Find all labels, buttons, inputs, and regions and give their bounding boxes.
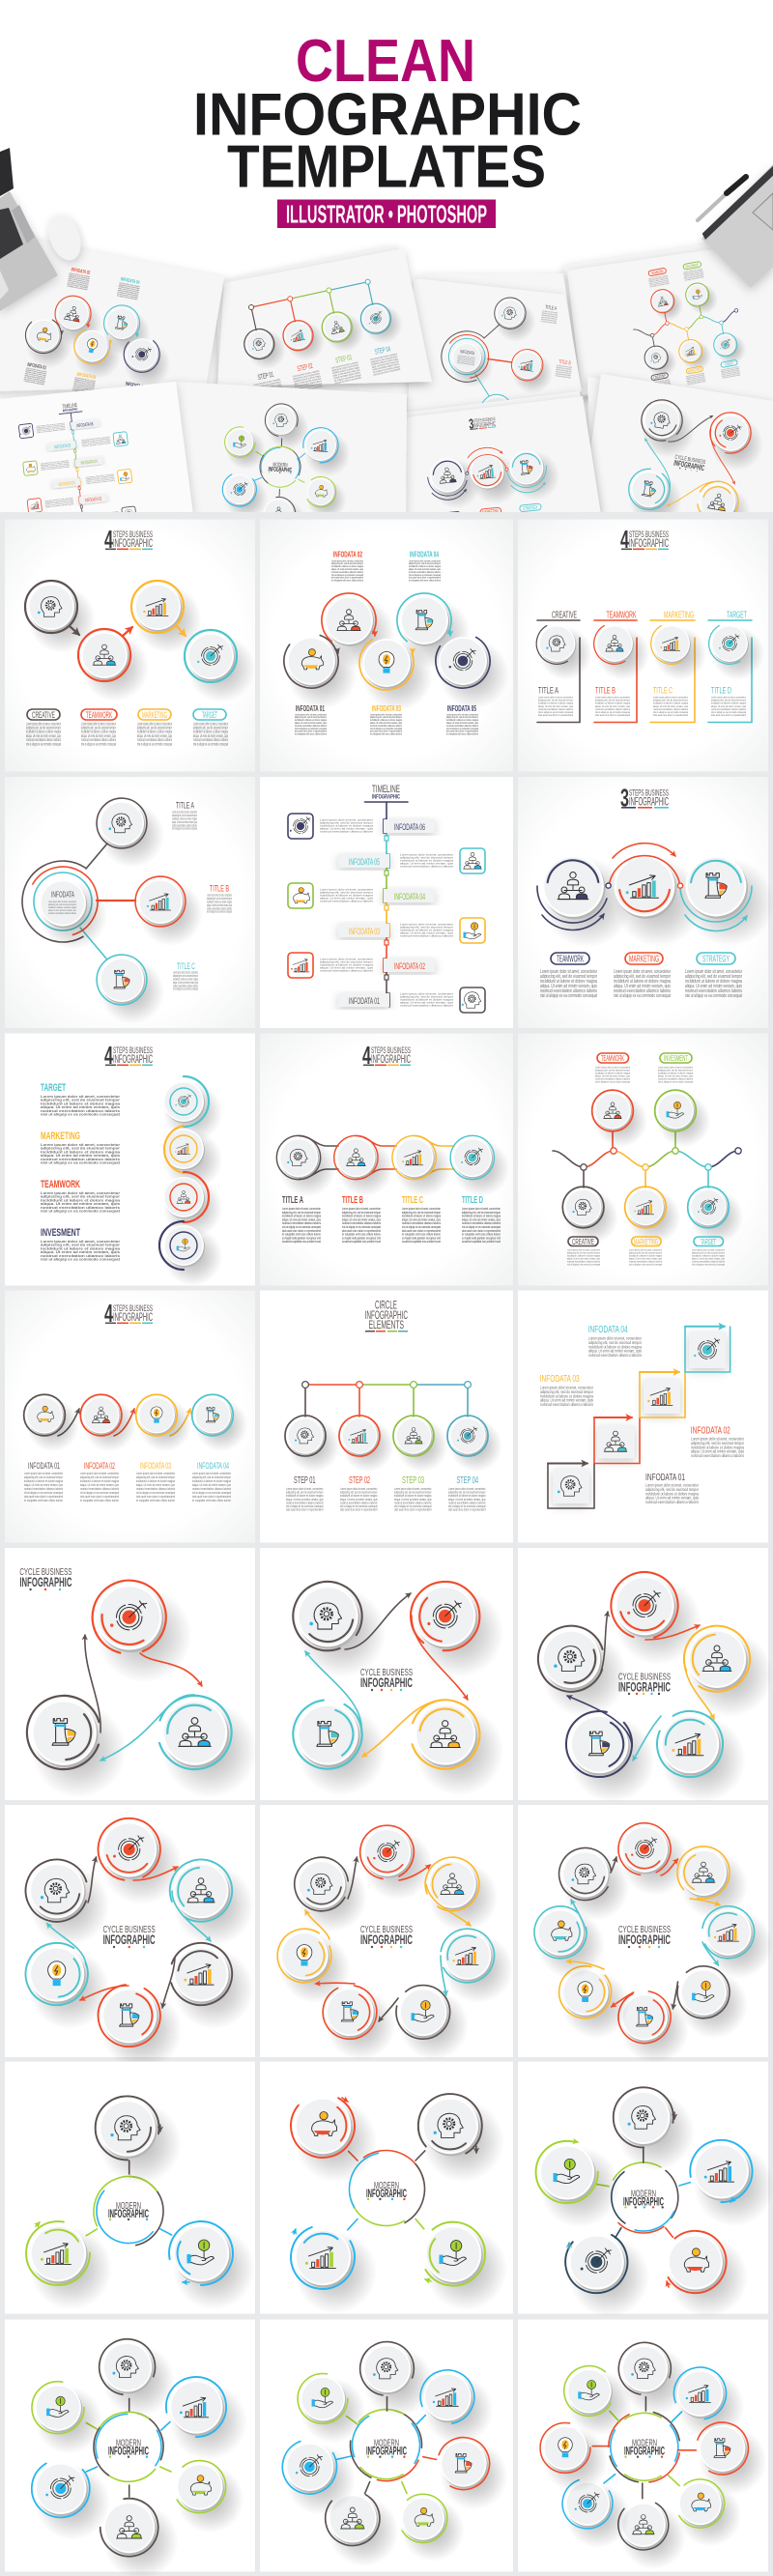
connectors — [595, 2147, 690, 2238]
labels — [24, 1461, 232, 1503]
panel: cycle 8 — [518, 1805, 773, 2064]
bottom labels: TARGET — [701, 1238, 716, 1246]
item texts: INVESMENT — [41, 1227, 80, 1239]
circles — [279, 2081, 507, 2314]
item texts — [41, 1082, 121, 1262]
heading dots — [624, 2206, 664, 2209]
circle: head — [283, 1572, 386, 1677]
descriptions — [26, 721, 228, 746]
icons — [558, 1338, 720, 1496]
heading dots — [628, 1946, 660, 1948]
panel: four columns with brackets — [518, 520, 768, 771]
panel: wavy chain — [260, 1034, 513, 1285]
descriptions — [540, 969, 743, 999]
pill labels: INFODATA 01 — [349, 996, 380, 1006]
lower circles — [562, 1187, 743, 1244]
labels: INFODATA 01 — [28, 1461, 60, 1471]
heading dots — [371, 1946, 402, 1948]
hub arcs — [596, 2399, 692, 2495]
panel: hub with three branches — [5, 777, 255, 1028]
top labels — [595, 1053, 694, 1083]
titles: TITLE B — [210, 884, 229, 894]
circle: hand — [163, 1225, 222, 1286]
sheet: timeline infographic — [16, 398, 136, 531]
notebook — [701, 164, 773, 288]
panel: cycle 3 — [5, 1548, 257, 1800]
heading — [108, 2201, 149, 2220]
column: creative: TITLE A — [538, 686, 558, 696]
circle: tower — [16, 1685, 127, 1798]
circle: tower — [686, 856, 773, 947]
circles — [26, 2096, 255, 2310]
heading dots — [109, 2456, 148, 2458]
circle: bulb — [352, 628, 433, 711]
steps: STEP 04 — [456, 1474, 478, 1486]
circles — [285, 1416, 502, 1472]
icon boxes — [288, 814, 485, 1013]
heading — [618, 1672, 671, 1695]
arrows — [305, 1857, 471, 2021]
circle: teamwork — [78, 629, 149, 701]
labels bottom — [295, 704, 478, 736]
circle: piggy — [276, 626, 358, 709]
labels bottom: INFODATA 03 — [372, 704, 401, 713]
marker pen — [698, 177, 746, 220]
arrows — [58, 1409, 190, 1436]
item texts: MARKETING — [41, 1131, 80, 1142]
heading — [108, 2439, 149, 2458]
sheet: three steps infographic — [422, 409, 564, 539]
connectors — [80, 844, 135, 959]
connector dots — [606, 883, 683, 888]
hub disc — [40, 880, 107, 950]
mouse — [43, 211, 86, 265]
hub arcs — [82, 2165, 175, 2257]
heading — [19, 1567, 72, 1589]
panel: 4 steps arrows — [5, 520, 255, 771]
connecting arcs — [537, 844, 752, 931]
spine — [384, 802, 389, 1007]
panel: modern 4 — [260, 2062, 513, 2314]
squares — [553, 1331, 727, 1503]
texts: INFODATA 01 — [645, 1472, 685, 1483]
labels bottom: INFODATA 01 — [296, 704, 325, 713]
circle: head — [97, 798, 164, 868]
heading — [366, 2181, 407, 2200]
upper circles — [592, 1090, 710, 1147]
laptop — [0, 148, 58, 311]
tree lines — [305, 1385, 468, 1417]
circles — [540, 2338, 766, 2569]
circle: chart — [135, 876, 203, 946]
panel: modern 8 — [518, 2319, 768, 2572]
steps: STEP 03 — [402, 1474, 424, 1486]
heading: INFOGRAPHIC — [365, 1308, 408, 1322]
sheet: five circles infographic — [12, 260, 186, 409]
heading — [360, 1668, 413, 1690]
bottom labels: CREATIVE — [572, 1238, 594, 1246]
circle: target — [84, 1572, 192, 1682]
titles and text — [282, 1195, 501, 1244]
labels top: INFODATA 04 — [410, 551, 439, 558]
panel: timeline — [260, 777, 513, 1028]
brackets — [548, 1327, 730, 1508]
title: INFOGRAPHIC: INFOGRAPHIC — [193, 81, 582, 149]
titles and text: TITLE D — [462, 1195, 483, 1206]
panel: wave with nodes — [518, 1034, 768, 1285]
circle: team — [148, 1685, 257, 1798]
arrow tips — [36, 2125, 189, 2282]
half arcs — [159, 1076, 209, 1270]
arrow tips — [294, 2098, 476, 2281]
pill labels: INFODATA 03 — [349, 927, 380, 936]
hub arcs — [335, 2394, 437, 2496]
heading dots — [371, 1689, 402, 1691]
heading dots — [29, 1589, 61, 1590]
sheet: modern infographic — [214, 398, 353, 547]
circle: head — [276, 1135, 336, 1196]
column: teamwork — [587, 611, 649, 723]
badge: illustrator photoshop — [277, 199, 496, 228]
circle: team — [334, 1135, 393, 1196]
panel: cycle 5 — [518, 1548, 773, 1802]
circle: chart — [615, 856, 702, 947]
circle: chart — [163, 1129, 222, 1189]
panel: cycle 7 — [260, 1805, 513, 2060]
hero: stacked template sheets — [0, 230, 773, 547]
heading — [620, 525, 669, 554]
circles — [272, 2337, 508, 2566]
arrows — [46, 1857, 211, 2008]
hub arcs — [79, 2398, 178, 2496]
column: marketing: TITLE C — [653, 686, 673, 696]
connectors — [348, 2151, 425, 2230]
heading — [104, 1299, 153, 1328]
wave line — [553, 1131, 738, 1188]
column: creative — [529, 611, 592, 723]
heading — [618, 1925, 671, 1947]
texts: INFODATA 03 — [540, 1373, 580, 1385]
titles — [172, 800, 232, 991]
circles — [536, 2087, 773, 2317]
nodes — [581, 1148, 741, 1170]
column: marketing — [644, 611, 706, 723]
bottom labels — [567, 1237, 726, 1266]
labels: TARGET — [202, 710, 217, 720]
panel: vertical chain — [5, 1034, 255, 1286]
pills: TEAMWORK — [557, 955, 584, 964]
heading — [360, 1925, 413, 1947]
pill labels — [349, 822, 425, 1006]
arrows — [567, 1612, 714, 1760]
pill labels: INFODATA 02 — [394, 961, 425, 971]
sheet: steps infographic — [236, 274, 413, 402]
circles — [17, 1814, 254, 2071]
title: CLEAN: CLEAN — [296, 28, 475, 95]
panel: four steps row — [5, 1291, 255, 1542]
circle: target — [185, 630, 255, 702]
circle: team — [310, 582, 395, 669]
text blocks — [320, 818, 454, 1007]
heading — [362, 1041, 411, 1070]
column: creative: CREATIVE — [552, 611, 577, 620]
hub arcs — [331, 2134, 441, 2244]
pills: STRATEGY — [702, 955, 730, 964]
heading — [103, 1925, 156, 1947]
heading — [366, 2439, 407, 2458]
circle: team — [542, 855, 632, 948]
hub disc: INFODATA — [51, 891, 74, 900]
bottom labels: MARKETING — [634, 1238, 658, 1246]
heading — [104, 1041, 153, 1070]
panel: modern 7 — [260, 2319, 513, 2572]
panel: cycle 4 — [260, 1548, 513, 1800]
panel: circle infographic elements — [260, 1291, 513, 1542]
heading: CIRCLE — [375, 1301, 397, 1312]
circle: creative — [25, 581, 96, 653]
heading dots — [628, 1693, 660, 1695]
labels: INFODATA 03 — [140, 1461, 171, 1471]
circle: chart — [392, 1135, 451, 1196]
heading — [620, 783, 669, 812]
heading — [365, 1301, 408, 1331]
heading — [624, 2439, 665, 2458]
steps: STEP 02 — [349, 1474, 370, 1486]
title: TEMPLATES: TEMPLATES — [227, 133, 546, 201]
column: target: TARGET — [727, 611, 747, 620]
item texts: TEAMWORK — [41, 1179, 80, 1190]
pill labels: INFODATA 05 — [349, 857, 380, 867]
column: teamwork: TITLE B — [595, 686, 616, 696]
panel: modern 3 — [5, 2062, 255, 2314]
heading dots — [624, 2456, 663, 2458]
labels: MARKETING — [142, 710, 167, 720]
circle: target — [426, 624, 509, 709]
heading dots — [367, 2198, 406, 2200]
circle: target — [163, 1081, 222, 1142]
titles and text: TITLE A — [282, 1195, 303, 1206]
circles — [270, 1821, 513, 2060]
circle: team — [163, 1177, 222, 1238]
panel: 3 steps — [518, 777, 773, 1028]
labels top — [331, 551, 441, 583]
circles — [530, 1818, 773, 2064]
labels — [27, 709, 226, 720]
pills — [551, 953, 735, 964]
panel: staircase — [518, 1291, 768, 1542]
heading dots — [113, 1946, 145, 1948]
labels: INFODATA 04 — [197, 1461, 229, 1471]
circles — [20, 2334, 247, 2576]
heading dots — [367, 2456, 406, 2458]
circle: tower — [280, 1687, 386, 1795]
timeline nodes — [385, 836, 388, 980]
texts — [540, 1324, 744, 1505]
circle: tower — [97, 955, 164, 1024]
heading: INFOGRAPHIC — [372, 794, 400, 800]
circle row — [24, 1394, 247, 1452]
pill labels: INFODATA 06 — [394, 822, 425, 832]
hub rings — [8, 846, 118, 957]
heading — [104, 525, 153, 554]
panel: modern 6 — [5, 2319, 255, 2576]
connectors — [86, 2161, 172, 2236]
sheet: hub infographic — [422, 288, 581, 447]
badge: illustrator photoshop: ILLUSTRATOR • PHOTOSHOP — [286, 199, 487, 228]
column: teamwork: TEAMWORK — [607, 611, 637, 620]
heading dots — [109, 2218, 148, 2220]
heading: ELEMENTS — [369, 1320, 404, 1331]
labels: CREATIVE — [32, 710, 55, 720]
labels: TEAMWORK — [86, 710, 112, 720]
circle: target — [396, 1567, 503, 1677]
pills — [338, 819, 435, 1007]
texts: INFODATA 02 — [691, 1425, 730, 1437]
panel: five interlocking circles — [260, 520, 513, 771]
circle: target — [450, 1135, 509, 1196]
titles: TITLE A — [176, 800, 194, 810]
circle: tower — [386, 582, 471, 669]
connectors — [336, 2397, 437, 2494]
arrows — [305, 1593, 468, 1757]
column: marketing: MARKETING — [664, 611, 694, 620]
hub arcs — [593, 2147, 693, 2247]
titles: TITLE C — [177, 961, 195, 971]
pills: MARKETING — [629, 955, 659, 964]
heading — [623, 2190, 664, 2209]
column: target: TITLE D — [711, 686, 731, 696]
nodes — [302, 1382, 471, 1388]
labels bottom: INFODATA 05 — [447, 704, 476, 713]
top labels: INVESMENT — [664, 1054, 688, 1063]
labels: INFODATA 02 — [84, 1461, 115, 1471]
arrows — [85, 1635, 202, 1760]
top labels: TEAMWORK — [601, 1054, 624, 1063]
connectors — [86, 2398, 171, 2497]
panel: cycle 6 — [5, 1805, 255, 2071]
circles — [529, 1562, 773, 1802]
waves — [299, 1136, 454, 1179]
titles and text: TITLE B — [342, 1195, 363, 1206]
arrows — [567, 1857, 720, 2009]
texts: INFODATA 04 — [588, 1324, 628, 1335]
sheet: cycle infographic — [616, 387, 770, 544]
heading — [365, 784, 408, 802]
column: target — [701, 611, 764, 723]
titles and text: TITLE C — [402, 1195, 423, 1206]
connectors — [592, 2397, 696, 2499]
steps: STEP 01 — [294, 1474, 316, 1486]
circle: team — [401, 1690, 503, 1795]
panel: modern 5 — [518, 2062, 773, 2317]
sheet: wave infographic — [623, 256, 751, 393]
heading: TIMELINE — [372, 784, 400, 795]
item texts: TARGET — [41, 1082, 66, 1094]
labels top: INFODATA 02 — [333, 551, 362, 558]
pill labels: INFODATA 04 — [394, 892, 425, 902]
arrow tips — [337, 630, 450, 653]
arrow tips — [569, 2112, 734, 2287]
circle: marketing — [131, 581, 202, 653]
arrows — [70, 625, 186, 636]
steps — [286, 1474, 486, 1512]
